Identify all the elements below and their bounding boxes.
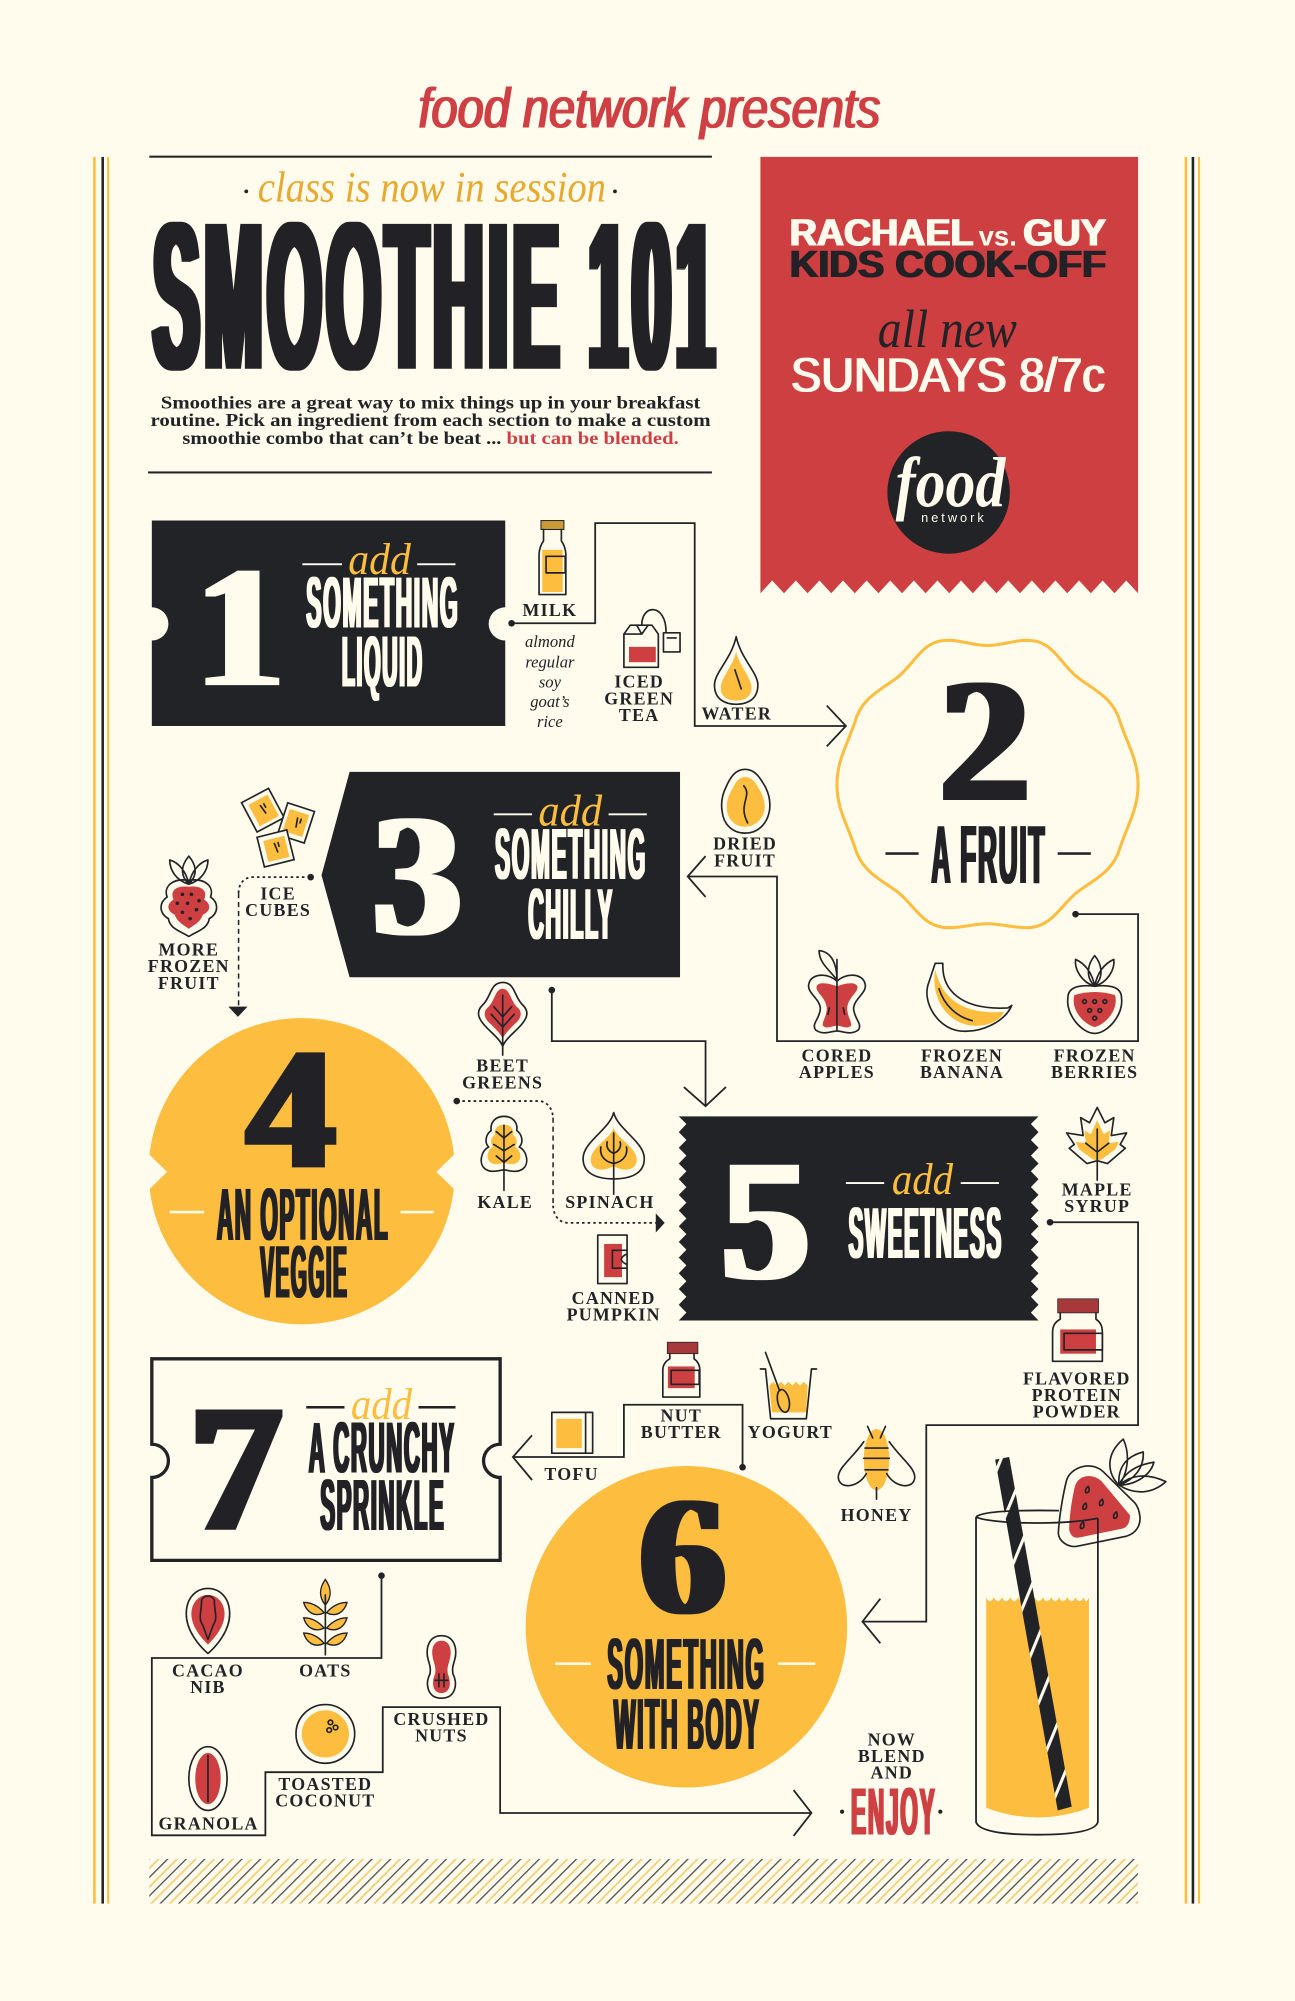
icon: nut butter jar xyxy=(663,1342,700,1397)
label: frozen berries: BERRIES xyxy=(1051,1062,1138,1082)
icon: kale xyxy=(481,1116,527,1190)
icon: frozen berries xyxy=(1068,956,1122,1033)
connector 5 to 6 xyxy=(862,1219,1138,1643)
icon: canned pumpkin xyxy=(598,1235,627,1284)
label: yogurt: YOGURT xyxy=(748,1422,833,1442)
tagline: class is now in session xyxy=(258,164,606,212)
text: A CRUNCHY xyxy=(309,1407,455,1488)
icon: protein powder jar xyxy=(1053,1299,1102,1361)
icon: tofu xyxy=(552,1412,593,1453)
label: nut butter: NUT xyxy=(661,1405,702,1425)
icon: cored apple xyxy=(809,951,865,1033)
panel: show promo xyxy=(760,157,1138,593)
label: cored apples: CORED xyxy=(802,1046,872,1066)
icon: granola xyxy=(189,1747,227,1810)
food network logo xyxy=(887,431,1010,554)
intro text: smoothie combo that can’t be beat ... xyxy=(182,428,501,448)
illustration: smoothie glass xyxy=(976,1439,1166,1835)
food network logo: food xyxy=(896,444,1006,523)
label: crushed nuts: CRUSHED xyxy=(393,1709,490,1729)
label: cacao nib: CACAO xyxy=(172,1660,244,1680)
panel: step 3: CHILLY xyxy=(528,874,614,955)
label: flavored protein powder: FLAVORED xyxy=(1023,1368,1131,1388)
enjoy callout: NOW xyxy=(868,1729,916,1749)
step 1 heading: add xyxy=(348,534,411,584)
text: ENJOY xyxy=(851,1776,936,1850)
label: more frozen fruit: FRUIT xyxy=(158,973,220,993)
panel: step 1 xyxy=(152,521,505,726)
icon: oats xyxy=(304,1580,347,1655)
icon: milk xyxy=(539,521,566,595)
label: oats: OATS xyxy=(299,1660,352,1680)
text: SOMETHING xyxy=(495,814,647,895)
label: spinach: SPINACH xyxy=(565,1192,655,1212)
label: frozen banana: FROZEN xyxy=(921,1046,1003,1066)
icon: honey bee xyxy=(838,1426,915,1499)
text: SPRINKLE xyxy=(320,1465,445,1546)
dotted connector 4 to 5 xyxy=(453,1098,665,1232)
label: dried fruit: FRUIT xyxy=(714,850,776,870)
step 3 heading: add xyxy=(538,785,603,835)
numeral 7: 7 xyxy=(190,1366,282,1570)
label: frozen berries: FROZEN xyxy=(1054,1046,1136,1066)
numeral 3: 3 xyxy=(374,778,461,972)
label: milk: MILK xyxy=(523,600,577,620)
show name: GUY xyxy=(1023,212,1106,255)
text: SOMETHING xyxy=(607,1624,766,1705)
intro text xyxy=(151,392,711,448)
label: water: WATER xyxy=(702,704,772,724)
text: SOMETHING xyxy=(306,563,459,644)
step 1 heading xyxy=(302,534,459,702)
title block xyxy=(148,156,720,473)
icon: spinach xyxy=(583,1113,644,1194)
intro text: but can be blended. xyxy=(507,428,679,448)
show name: RACHAEL xyxy=(790,212,973,255)
step 7 heading xyxy=(306,1379,455,1546)
icon: toasted coconut xyxy=(296,1705,355,1763)
icon: banana xyxy=(927,963,1012,1031)
icon: water drop xyxy=(714,637,758,704)
milk varieties: goat’s xyxy=(530,692,570,711)
enjoy callout: AND xyxy=(871,1763,913,1783)
label: crushed nuts: NUTS xyxy=(415,1726,468,1746)
panel: step 7 xyxy=(152,1359,500,1570)
step 3 heading xyxy=(494,785,647,955)
dotted connector 3 to 4 xyxy=(228,874,314,1017)
icon: more frozen fruit xyxy=(161,856,217,936)
label: tofu: TOFU xyxy=(544,1464,599,1484)
label: maple syrup: MAPLE xyxy=(1062,1179,1133,1199)
side rules left xyxy=(93,157,109,1904)
panel: step 6 xyxy=(526,1462,847,1787)
intro text: Smoothies are a great way to mix things up in your breakfast xyxy=(161,392,701,412)
icon: ice cubes xyxy=(242,788,314,867)
label: kale: KALE xyxy=(477,1192,533,1212)
food network logo: network xyxy=(921,510,984,525)
panel: step 2: A FRUIT xyxy=(931,808,1046,901)
label: canned pumpkin: CANNED xyxy=(572,1288,656,1308)
step 4 heading xyxy=(170,1173,434,1314)
label: dried fruit: DRIED xyxy=(713,834,777,854)
step 6 heading xyxy=(555,1624,815,1765)
label: beet greens: GREENS xyxy=(462,1072,543,1092)
icon: yogurt xyxy=(760,1352,817,1419)
connector 2 to 3 xyxy=(688,856,1138,1041)
garnish strawberry xyxy=(1058,1439,1166,1547)
label: nut butter: BUTTER xyxy=(641,1422,722,1442)
icon: dried fruit xyxy=(722,769,770,833)
show name: KIDS COOK-OFF xyxy=(790,243,1106,286)
label: ice cubes: CUBES xyxy=(245,900,311,920)
glass outline xyxy=(976,1510,1098,1835)
label: cored apples: APPLES xyxy=(799,1062,875,1082)
milk varieties: rice xyxy=(537,712,563,731)
panel: step 6: WITH BODY xyxy=(614,1684,760,1765)
label: iced green tea: TEA xyxy=(619,705,659,725)
show name xyxy=(790,212,1106,286)
liquid xyxy=(986,1597,1089,1817)
label: frozen banana: BANANA xyxy=(920,1062,1004,1082)
numeral 1: 1 xyxy=(196,530,283,723)
header: food network presents: food network presents xyxy=(418,77,880,140)
label: toasted coconut: COCONUT xyxy=(275,1791,375,1811)
enjoy callout: BLEND xyxy=(858,1746,926,1766)
straw xyxy=(995,1457,1072,1810)
label: toasted coconut: TOASTED xyxy=(278,1774,372,1794)
icon: iced green tea xyxy=(624,610,680,667)
label: cacao nib: NIB xyxy=(190,1677,226,1697)
icon: beet greens xyxy=(478,982,527,1055)
step 5 heading xyxy=(846,1154,1003,1274)
connector 6 to 7 xyxy=(513,1405,746,1480)
numeral 5: 5 xyxy=(722,1123,809,1316)
connector 7 to enjoy xyxy=(152,1572,811,1836)
side rules right xyxy=(1185,157,1200,1904)
label: more frozen fruit: FROZEN xyxy=(148,956,230,976)
label: granola: GRANOLA xyxy=(158,1814,259,1834)
numeral 4: 4 xyxy=(247,1011,335,1205)
step 4 heading: VEGGIE xyxy=(260,1231,348,1314)
label: canned pumpkin: PUMPKIN xyxy=(567,1305,661,1325)
numeral 6: 6 xyxy=(640,1462,725,1650)
panel: step 1: LIQUID xyxy=(342,621,424,702)
step 7 heading: add xyxy=(351,1379,413,1429)
numeral 2: 2 xyxy=(941,643,1029,839)
show name: vs. xyxy=(979,221,1017,252)
step 5 heading: add xyxy=(892,1154,954,1204)
milk varieties: regular xyxy=(525,652,575,671)
milk varieties: soy xyxy=(539,673,562,692)
label: more frozen fruit: MORE xyxy=(158,940,219,960)
icon: cacao nib xyxy=(186,1588,230,1654)
label: honey: HONEY xyxy=(841,1505,912,1525)
milk varieties: almond xyxy=(525,632,575,651)
label: maple syrup: SYRUP xyxy=(1064,1196,1130,1216)
enjoy callout xyxy=(840,1729,942,1850)
label: flavored protein powder: POWDER xyxy=(1033,1401,1121,1421)
panel: step 3 xyxy=(322,772,680,977)
label: iced green tea: GREEN xyxy=(604,688,674,708)
air time: SUNDAYS 8/7c xyxy=(791,349,1105,403)
panel: step 5 xyxy=(679,1116,1039,1321)
panel: step 2 xyxy=(837,640,1138,928)
label: flavored protein powder: PROTEIN xyxy=(1032,1385,1122,1405)
connector 1 to 2 xyxy=(508,523,846,746)
icon: crushed nuts xyxy=(427,1636,456,1698)
icon: maple leaf xyxy=(1067,1107,1127,1180)
label: iced green tea: ICED xyxy=(614,672,664,692)
connector 3 to 5 xyxy=(548,987,726,1106)
hatched footer band xyxy=(149,1859,1138,1904)
label: ice cubes: ICE xyxy=(260,883,296,903)
panel: step 4 xyxy=(143,1011,461,1324)
label: beet greens: BEET xyxy=(476,1056,529,1076)
intro text: routine. Pick an ingredient from each section to make a custom xyxy=(151,410,711,430)
all new: all new xyxy=(878,299,1017,359)
text: AN OPTIONAL xyxy=(217,1173,389,1256)
